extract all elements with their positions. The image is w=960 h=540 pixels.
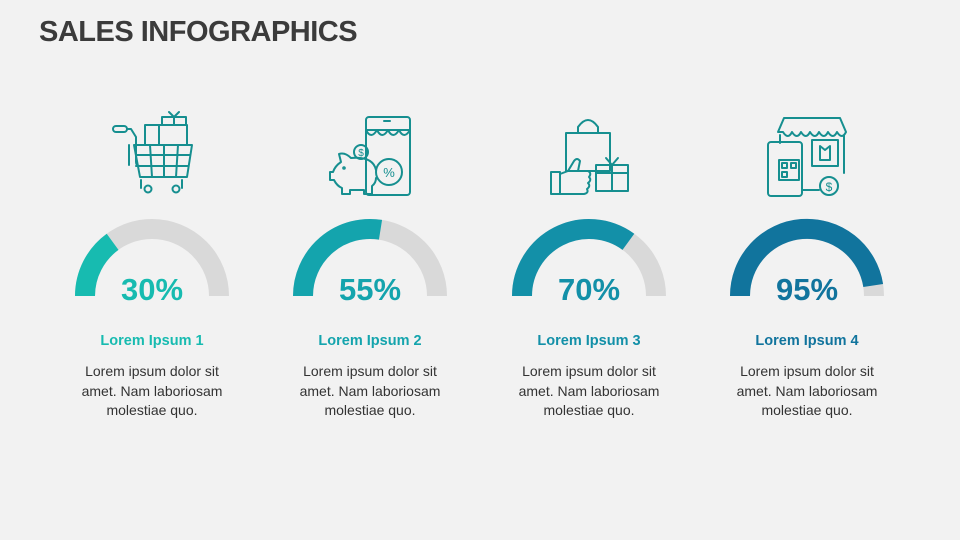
gauge 4 — [740, 229, 874, 307]
text 1: amet. Nam laboriosam — [82, 382, 222, 398]
gauge 4: 95% — [776, 272, 838, 307]
icon: shopping cart — [113, 112, 192, 192]
heading 3: Lorem Ipsum 3 — [537, 333, 641, 349]
gauge 2 — [303, 229, 437, 307]
text 4 — [737, 363, 877, 418]
gauge 3 — [522, 229, 656, 307]
text 3: amet. Nam laboriosam — [519, 382, 659, 398]
icon: piggy bank and phone — [330, 117, 410, 195]
heading 2: Lorem Ipsum 2 — [318, 333, 422, 349]
gauge 1 — [85, 229, 219, 307]
heading 1: Lorem Ipsum 1 — [100, 333, 204, 349]
icon: store with QR and dollar — [768, 118, 846, 196]
icon: piggy bank and phone: % — [383, 165, 395, 180]
text 3 — [519, 363, 659, 418]
icon: piggy bank and phone: $ — [358, 148, 364, 159]
gauge 3: 70% — [558, 272, 620, 307]
gauge 1: 30% — [121, 272, 183, 307]
text 3: molestiae quo. — [543, 402, 635, 418]
heading 4: Lorem Ipsum 4 — [755, 333, 859, 349]
text 3: Lorem ipsum dolor sit — [522, 363, 656, 379]
icon: store with QR and dollar: $ — [826, 180, 833, 194]
text 2: molestiae quo. — [324, 402, 416, 418]
text 1: Lorem ipsum dolor sit — [85, 363, 219, 379]
text 1: molestiae quo. — [106, 402, 198, 418]
title: SALES INFOGRAPHICS — [39, 16, 357, 48]
text 1 — [82, 363, 222, 418]
text 2: Lorem ipsum dolor sit — [303, 363, 437, 379]
text 4: Lorem ipsum dolor sit — [740, 363, 874, 379]
text 2: amet. Nam laboriosam — [300, 382, 440, 398]
gauge 2: 55% — [339, 272, 401, 307]
text 4: amet. Nam laboriosam — [737, 382, 877, 398]
text 2 — [300, 363, 440, 418]
icon: thumbs up and gift — [551, 120, 628, 194]
text 4: molestiae quo. — [761, 402, 853, 418]
